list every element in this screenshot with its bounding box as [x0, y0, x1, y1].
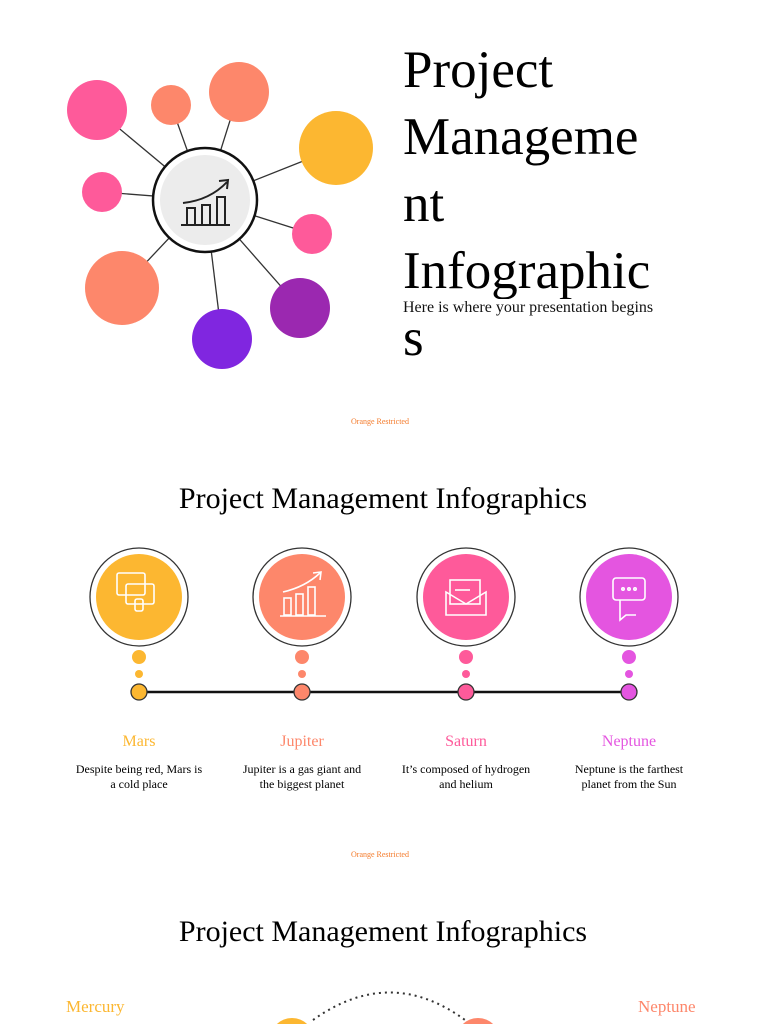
item: Mars: a cold place: [110, 777, 168, 791]
item: Jupiter: Jupiter is a gas giant and: [243, 762, 361, 776]
hub diagram: [67, 62, 373, 369]
item: Saturn: and helium: [439, 777, 493, 791]
title: Infographic: [403, 242, 650, 300]
title: Project: [403, 41, 553, 99]
footer label 2: Orange Restricted: [351, 850, 409, 859]
label: Mercury: Mercury: [66, 997, 125, 1016]
item: Saturn: [402, 733, 530, 791]
footer label: Orange Restricted: [351, 417, 409, 426]
title: Manageme: [403, 108, 638, 166]
item: Neptune: Neptune: [602, 733, 656, 750]
item: Saturn: It’s composed of hydrogen: [402, 762, 530, 776]
title: s: [403, 309, 424, 367]
title: nt: [403, 175, 444, 233]
item: Mars: [76, 733, 202, 791]
item: Saturn: Saturn: [445, 733, 487, 750]
item: Mars: Despite being red, Mars is: [76, 762, 202, 776]
bottom arc diagram: [277, 992, 493, 1024]
label: Neptune: Neptune: [638, 997, 696, 1016]
item: Neptune: [575, 733, 683, 791]
item: Neptune: planet from the Sun: [582, 777, 676, 791]
section heading 2: Project Management Infographics: [179, 915, 587, 948]
timeline: [89, 547, 679, 701]
subtitle: Here is where your presentation begins: [403, 299, 653, 316]
item: Jupiter: [243, 733, 361, 791]
title: [403, 41, 650, 367]
item: Jupiter: Jupiter: [280, 733, 324, 750]
section heading: Project Management Infographics: [179, 482, 587, 515]
item: Neptune: Neptune is the farthest: [575, 762, 683, 776]
item: Mars: Mars: [123, 733, 155, 750]
icon: chart: [181, 180, 230, 225]
item: Jupiter: the biggest planet: [260, 777, 344, 791]
